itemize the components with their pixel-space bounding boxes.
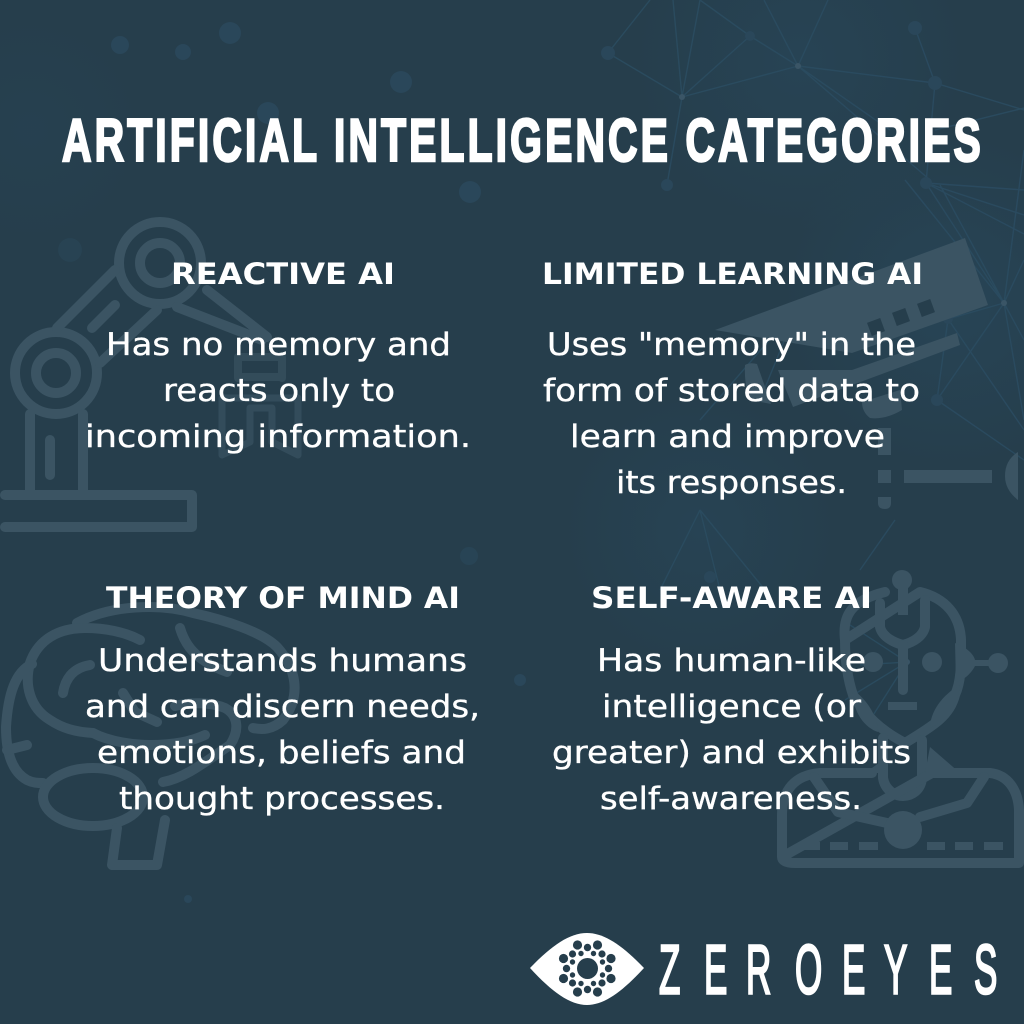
panel: reactive AI xyxy=(85,257,471,455)
logo: ZeroEyes xyxy=(530,930,997,1009)
text block: self-aware AI description xyxy=(552,643,911,817)
heading: limited learning AI: LIMITED LEARNING AI xyxy=(542,257,923,291)
text block: theory of mind AI description xyxy=(85,643,480,817)
title: ARTIFICIAL INTELLIGENCE CATEGORIES xyxy=(62,107,981,174)
text block: self-aware AI description: self-awareness. xyxy=(600,781,862,817)
heading: theory of mind AI: THEORY OF MIND AI xyxy=(106,581,460,615)
text block: theory of mind AI description: thought processes. xyxy=(119,781,445,817)
text block: limited learning AI description: form of stored data to xyxy=(543,373,920,409)
icon: robot arm xyxy=(5,222,298,527)
panel: limited learning AI xyxy=(542,257,923,501)
icon: brain xyxy=(6,607,295,865)
text block: theory of mind AI description: emotions, beliefs and xyxy=(97,735,466,771)
icon: robot head xyxy=(782,570,1019,863)
wordmark: ZEROEYES xyxy=(659,930,997,1009)
text block: self-aware AI description: greater) and exhibits xyxy=(552,735,911,771)
text block: limited learning AI description: its responses. xyxy=(616,465,847,501)
text block: limited learning AI description: learn and improve xyxy=(570,419,885,455)
text block: self-aware AI description: Has human-like xyxy=(597,643,866,679)
heading: self-aware AI: SELF-AWARE AI xyxy=(591,581,872,615)
text block: reactive AI description: reacts only to xyxy=(163,373,395,409)
text block: reactive AI description xyxy=(85,327,471,455)
panel: theory of mind AI xyxy=(85,581,480,817)
text block: self-aware AI description: intelligence (or xyxy=(602,689,861,725)
panel: self-aware AI xyxy=(552,581,911,817)
icon: eye xyxy=(530,933,644,1005)
text block: limited learning AI description: Uses "memory" in the xyxy=(547,327,916,363)
text block: theory of mind AI description: Understands humans xyxy=(98,643,467,679)
text block: reactive AI description: incoming information. xyxy=(85,419,471,455)
text block: limited learning AI description xyxy=(543,327,920,501)
text block: theory of mind AI description: and can discern needs, xyxy=(85,689,480,725)
heading: reactive AI: REACTIVE AI xyxy=(171,257,395,291)
icon: security camera xyxy=(715,238,1018,509)
text block: reactive AI description: Has no memory and xyxy=(106,327,451,363)
